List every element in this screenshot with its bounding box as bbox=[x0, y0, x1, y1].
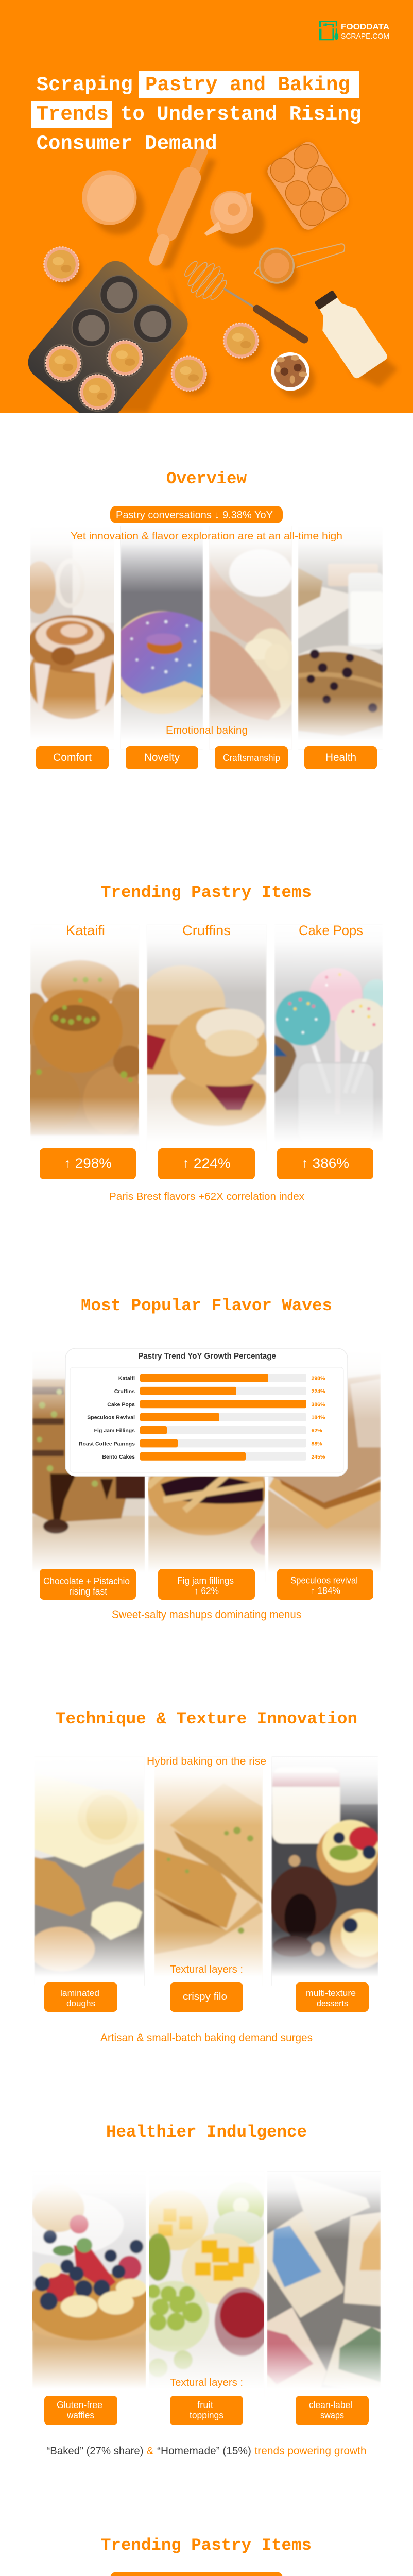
button: fruit toppings: toppings bbox=[190, 2410, 223, 2420]
photo strip: trending items bbox=[30, 946, 383, 1136]
photo strip: technique bbox=[29, 1757, 389, 1986]
button: gluten-free waffles: Gluten-free bbox=[57, 2400, 102, 2410]
panel: hero header bbox=[0, 0, 413, 432]
button: comfort bbox=[36, 746, 109, 769]
button: gluten-free waffles bbox=[44, 2396, 117, 2425]
photo strip: flavor waves bbox=[32, 1350, 381, 1582]
button: comfort: Comfort bbox=[53, 752, 92, 764]
bar row: fig jam fillings: 62% bbox=[311, 1428, 322, 1434]
icon: muffin tin bbox=[28, 261, 188, 413]
caption: artisan: Artisan & small-batch baking demand surges bbox=[100, 2032, 313, 2044]
bar row: speculoos revival: 184% bbox=[311, 1415, 325, 1421]
bar row: speculoos revival: Speculoos Revival bbox=[87, 1415, 135, 1421]
stat: cruffins growth: ↑ 224% bbox=[182, 1156, 231, 1171]
caption: baked and homemade: trends powering growth bbox=[254, 2445, 367, 2457]
button: craftsmanship bbox=[215, 746, 288, 769]
photo: mocha ganache bbox=[139, 2575, 276, 2576]
pill: pastry conversations: Pastry conversations ↓ 9.38% YoY bbox=[116, 510, 273, 521]
stat: cake pops growth bbox=[277, 1148, 373, 1179]
photo: oat bars and milk bbox=[298, 527, 383, 750]
bar row: cake pops: 386% bbox=[311, 1401, 325, 1408]
photo: chocolate pistachio pastry bbox=[32, 1350, 145, 1582]
button: clean-label swaps: swaps bbox=[320, 2410, 344, 2420]
title: Pastry and Baking bbox=[145, 74, 350, 96]
button: fruit toppings: fruit bbox=[197, 2400, 213, 2410]
label: textural layers: Textural layers : bbox=[170, 2377, 243, 2388]
button: gluten-free waffles: waffles bbox=[66, 2410, 94, 2420]
button: fruit toppings bbox=[170, 2396, 243, 2425]
bar row: kataifi: 298% bbox=[311, 1376, 325, 1382]
panel: technique and texture innovation bbox=[29, 1709, 389, 2044]
photo: galaxy donut bbox=[121, 526, 203, 750]
button: laminated doughs bbox=[44, 1982, 117, 2012]
photo: fig jam tart bbox=[148, 1477, 266, 1582]
title: to Understand Rising bbox=[121, 103, 362, 126]
bar row: bento cakes: 245% bbox=[311, 1454, 325, 1460]
bar row: cake pops bbox=[107, 1400, 325, 1408]
stat: cruffins growth bbox=[158, 1148, 255, 1179]
stat: kataifi growth: ↑ 298% bbox=[64, 1156, 112, 1171]
title: Trends bbox=[37, 103, 109, 126]
button: chocolate pistachio: Chocolate + Pistachio bbox=[43, 1576, 130, 1586]
pill: roast coffee pairing bbox=[110, 2572, 283, 2576]
bar row: cruffins: Cruffins bbox=[114, 1388, 135, 1395]
photo: fruit toppings bbox=[139, 2172, 270, 2398]
label: textural layers: Textural layers : bbox=[170, 1964, 243, 1975]
label: emotional baking: Emotional baking bbox=[166, 725, 248, 736]
photo: clean-label packages bbox=[267, 2172, 381, 2398]
photo: gluten-free waffles bbox=[3, 2172, 153, 2398]
icon: creamer jug bbox=[204, 191, 253, 236]
button: chocolate pistachio bbox=[40, 1569, 136, 1600]
button: crispy filo bbox=[170, 1982, 243, 2012]
icon: sieve bbox=[254, 244, 345, 283]
chart card: pastry trend growth bbox=[65, 1348, 348, 1476]
heading: trending pastry items: Trending Pastry Items bbox=[101, 2536, 312, 2555]
bar row: cruffins bbox=[114, 1387, 325, 1395]
button: health bbox=[304, 746, 377, 769]
button: crispy filo: crispy filo bbox=[183, 1991, 227, 2003]
label: cruffins: Cruffins bbox=[182, 923, 231, 938]
button: health: Health bbox=[325, 752, 356, 764]
photo: speculoos pastry bbox=[268, 1350, 381, 1582]
bar row: roast coffee pairings bbox=[79, 1439, 322, 1447]
title: Scraping bbox=[37, 74, 133, 96]
bar row: cake pops: Cake Pops bbox=[107, 1401, 135, 1408]
button: speculoos revival: Speculoos revival bbox=[290, 1575, 358, 1586]
panel: trending pastry items coffee bbox=[26, 2536, 383, 2576]
caption: baked and homemade bbox=[46, 2445, 367, 2457]
panel: healthier indulgence bbox=[3, 2123, 381, 2457]
logo: top right: SCRAPE.COM bbox=[341, 32, 389, 41]
icon: nut bowl bbox=[271, 352, 309, 391]
photo strip: healthier bbox=[3, 2172, 381, 2398]
button: clean-label swaps: clean-label bbox=[309, 2400, 352, 2410]
subtitle: hybrid baking: Hybrid baking on the rise bbox=[147, 1756, 266, 1767]
logo: top right bbox=[319, 21, 389, 41]
button: fig jam fillings bbox=[158, 1569, 255, 1600]
button: novelty bbox=[126, 746, 198, 769]
photo: multi-texture desserts bbox=[271, 1757, 378, 1986]
pill: pastry conversations bbox=[110, 506, 283, 523]
hero photo: baking flat lay bbox=[22, 139, 398, 432]
icon: egg carton bbox=[267, 142, 349, 230]
photo: hands kneading dough bbox=[209, 526, 299, 750]
bar row: cruffins: 224% bbox=[311, 1388, 325, 1395]
stat: cake pops growth: ↑ 386% bbox=[301, 1156, 349, 1171]
caption: baked and homemade: “Baked” (27% share) bbox=[46, 2445, 143, 2457]
button: craftsmanship: Craftsmanship bbox=[223, 753, 280, 763]
button: laminated doughs: laminated bbox=[60, 1988, 99, 1998]
bar row: bento cakes bbox=[102, 1452, 325, 1461]
subtitle: innovation: Yet innovation & flavor exploration are at an all-time high bbox=[71, 531, 342, 542]
label: kataifi: Kataifi bbox=[66, 923, 105, 938]
button: laminated doughs: doughs bbox=[66, 1998, 95, 2008]
heading: trending pastry items: Trending Pastry Items bbox=[101, 883, 312, 902]
button: fig jam fillings: ↑ 62% bbox=[194, 1586, 219, 1596]
heading: most popular flavor waves: Most Popular Flavor Waves bbox=[81, 1296, 332, 1315]
photo: tiramisu croissants bbox=[267, 2575, 383, 2576]
title highlight boxes bbox=[31, 71, 359, 128]
stat: kataifi growth bbox=[40, 1148, 136, 1179]
button: multi-texture desserts: multi-texture bbox=[306, 1988, 356, 1998]
heading: overview: Overview bbox=[166, 469, 247, 488]
photo: espresso glazes bbox=[26, 2575, 153, 2576]
bar row: speculoos revival bbox=[87, 1413, 325, 1421]
button: multi-texture desserts bbox=[296, 1982, 369, 2012]
button: multi-texture desserts: desserts bbox=[317, 1998, 348, 2008]
caption: baked and homemade: & bbox=[147, 2445, 153, 2457]
logo: top right: FOODDATA bbox=[341, 23, 389, 31]
title bbox=[37, 74, 362, 155]
bar row: kataifi: Kataifi bbox=[118, 1376, 135, 1382]
button: chocolate pistachio: rising fast bbox=[69, 1586, 107, 1597]
icon: loose muffins bbox=[44, 247, 259, 391]
chart title: Pastry Trend YoY Growth Percentage bbox=[138, 1352, 276, 1361]
bar row: fig jam fillings bbox=[94, 1426, 322, 1434]
panel: trending pastry items bbox=[20, 883, 390, 1202]
title: Consumer Demand bbox=[37, 132, 217, 155]
button: fig jam fillings: Fig jam fillings bbox=[177, 1575, 234, 1586]
bar row: roast coffee pairings: Roast Coffee Pairings bbox=[79, 1440, 135, 1447]
photo: kataifi nests bbox=[30, 953, 139, 1136]
photo: cake pops bbox=[274, 948, 383, 1134]
button: speculoos revival bbox=[277, 1569, 373, 1600]
photo strip: coffee pastry bbox=[26, 2575, 383, 2576]
button: speculoos revival: ↑ 184% bbox=[311, 1586, 340, 1596]
heading: healthier indulgence: Healthier Indulgence bbox=[106, 2123, 307, 2142]
photo: cruffins bbox=[146, 946, 267, 1131]
caption: baked and homemade: “Homemade” (15%) bbox=[157, 2445, 251, 2457]
button: novelty: Novelty bbox=[144, 752, 180, 764]
heading: technique and texture: Technique & Texture Innovation bbox=[56, 1709, 357, 1728]
caption: paris brest: Paris Brest flavors +62X correlation index bbox=[109, 1191, 304, 1202]
label: cake pops: Cake Pops bbox=[299, 923, 363, 938]
panel: most popular flavor waves bbox=[32, 1296, 381, 1621]
bar row: fig jam fillings: Fig Jam Fillings bbox=[94, 1428, 135, 1434]
icon: milk bottle bbox=[315, 291, 387, 378]
panel: overview bbox=[23, 469, 395, 769]
icon: flour bowl bbox=[82, 170, 136, 225]
bar row: roast coffee pairings: 88% bbox=[311, 1440, 322, 1447]
icon: whisk bbox=[183, 260, 304, 340]
photo: laminated dough bbox=[34, 1779, 144, 1986]
caption: sweet salty: Sweet-salty mashups dominating menus bbox=[112, 1608, 301, 1621]
bar row: bento cakes: Bento Cakes bbox=[102, 1454, 135, 1460]
button: clean-label swaps bbox=[296, 2396, 369, 2425]
icon: rolling pin bbox=[156, 151, 202, 259]
photo strip: overview bbox=[23, 526, 395, 750]
photo: crispy filo bbox=[154, 1757, 263, 1986]
photo: cinnamon roll bbox=[30, 548, 114, 731]
bar row: kataifi bbox=[118, 1374, 325, 1382]
